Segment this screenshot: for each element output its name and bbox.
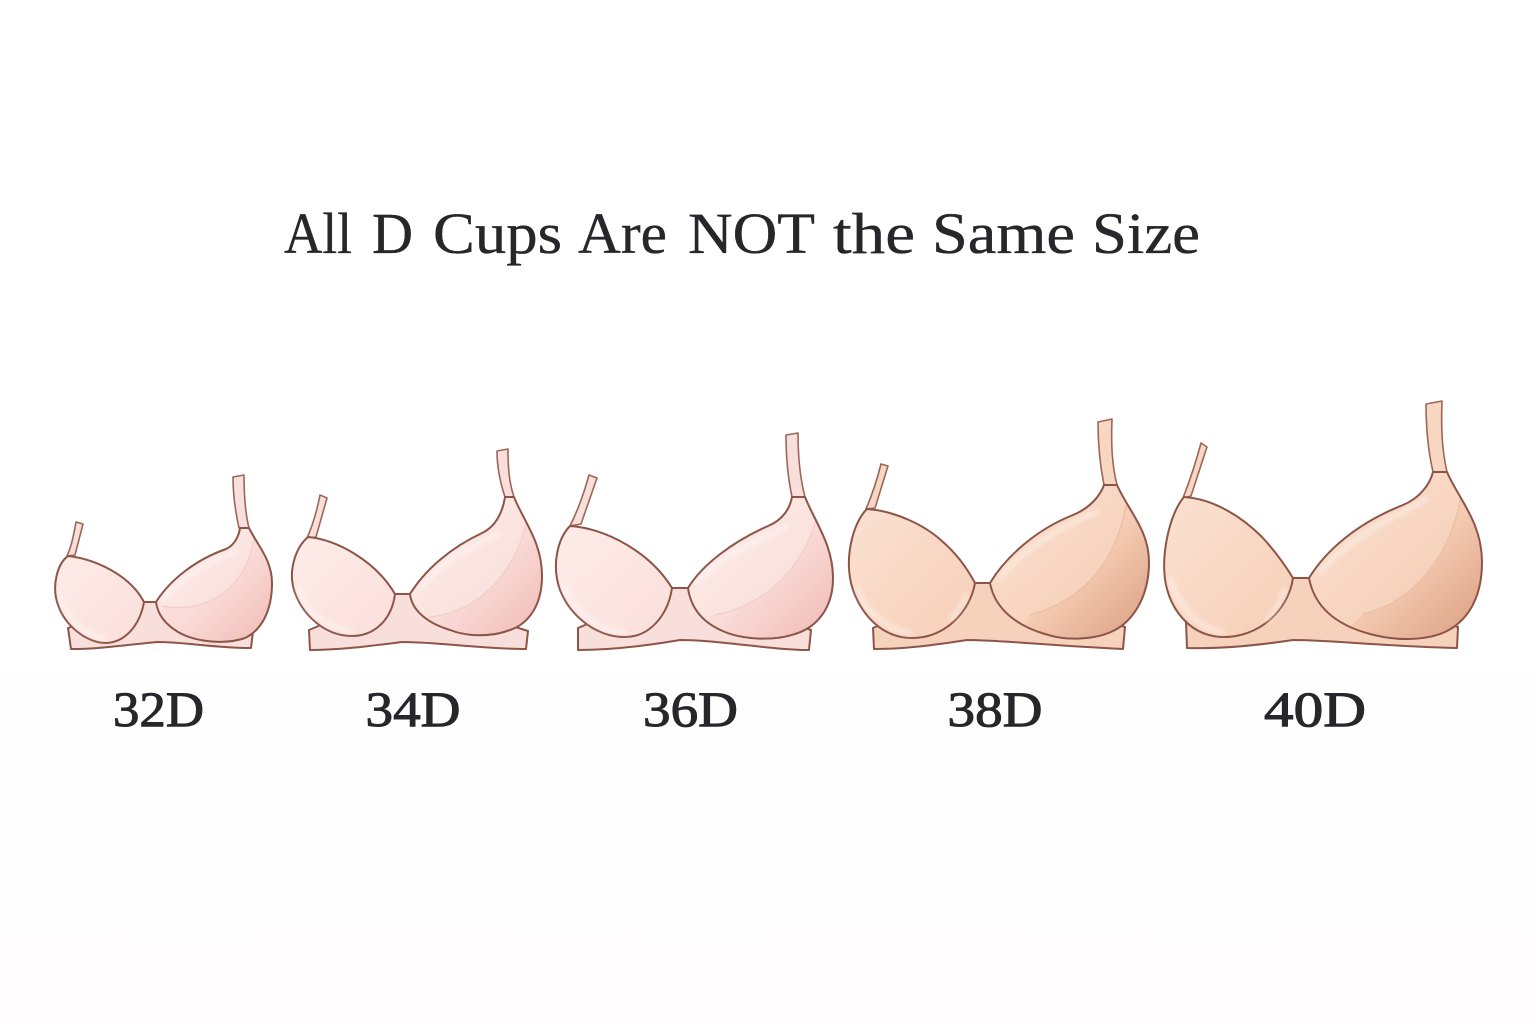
right cup bbox=[1308, 471, 1483, 640]
label: 40D: 40D bbox=[1264, 681, 1366, 737]
band bbox=[873, 583, 1125, 649]
left cup bbox=[292, 537, 395, 636]
band bbox=[68, 602, 253, 649]
bra illustration: 40D bbox=[1164, 401, 1495, 660]
label: 34D: 34D bbox=[366, 681, 460, 737]
left cup bbox=[556, 526, 672, 637]
left cup bbox=[55, 556, 144, 643]
left cup bbox=[1164, 497, 1293, 637]
bra illustration: 38D bbox=[849, 419, 1160, 660]
band bbox=[578, 588, 811, 650]
band bbox=[1186, 578, 1458, 648]
title: All bbox=[284, 201, 352, 266]
right cup bbox=[989, 484, 1150, 640]
title: Same bbox=[932, 201, 1075, 266]
title: NOT bbox=[688, 201, 815, 266]
right cup bbox=[409, 496, 543, 636]
straps bbox=[570, 433, 805, 526]
straps bbox=[1183, 401, 1447, 498]
title: the bbox=[833, 201, 915, 266]
title: D bbox=[372, 201, 413, 266]
title: Size bbox=[1092, 201, 1200, 266]
straps bbox=[67, 475, 249, 556]
bra illustration: 36D bbox=[556, 433, 845, 660]
band bbox=[309, 594, 528, 650]
title: Cups bbox=[433, 201, 562, 266]
left cup bbox=[849, 509, 975, 638]
right cup bbox=[155, 527, 273, 643]
bra illustration: 34D bbox=[292, 449, 555, 660]
straps bbox=[307, 449, 514, 538]
label: 38D: 38D bbox=[948, 681, 1042, 737]
right cup bbox=[687, 496, 834, 640]
label: 32D: 32D bbox=[113, 681, 204, 737]
label: 36D: 36D bbox=[643, 681, 738, 737]
title bbox=[284, 201, 1200, 266]
title: Are bbox=[578, 201, 667, 266]
straps bbox=[866, 419, 1117, 509]
bra illustration: 32D bbox=[55, 475, 285, 660]
